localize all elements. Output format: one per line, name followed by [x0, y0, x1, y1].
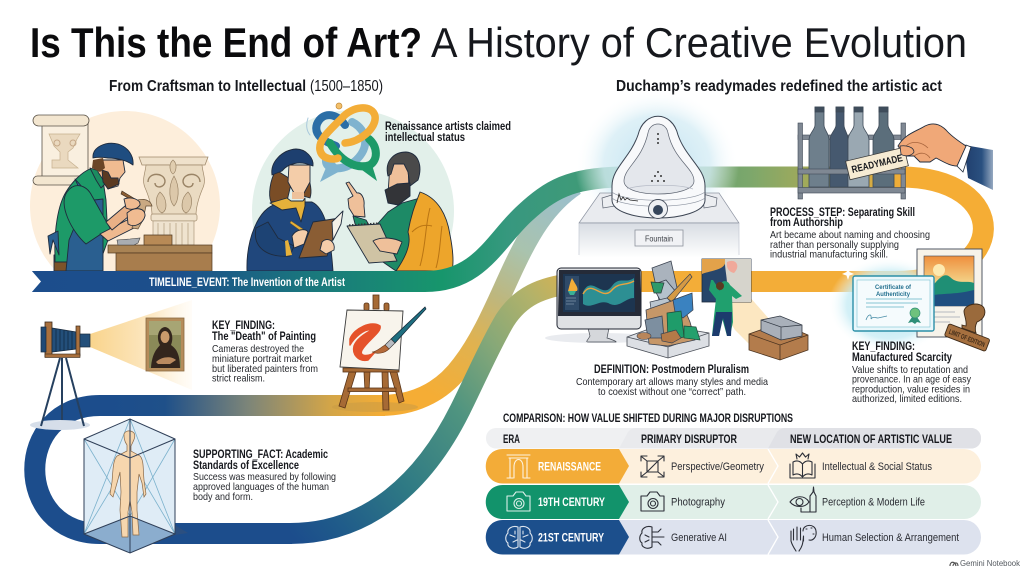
- icon: open book with crown: [790, 453, 815, 478]
- canvas: [340, 310, 403, 370]
- text block: manufactured scarcity: KEY_FINDING:: [852, 341, 915, 353]
- urinal body: [602, 116, 717, 218]
- header row: [486, 428, 981, 448]
- face: [388, 162, 409, 204]
- title: A History of Creative Evolution: [431, 19, 967, 66]
- text block: process step: PROCESS_STEP: Separating Skill: [770, 207, 915, 219]
- green shirt torso: [55, 169, 108, 262]
- row: 21st century: 21ST CENTURY: [538, 532, 604, 544]
- ribbon: timeline band: [31, 177, 905, 282]
- text block: manufactured scarcity: reproduction, value resides in: [852, 384, 970, 396]
- ribbon: upper mid band: [110, 395, 385, 416]
- apron: [66, 179, 103, 271]
- near arm: [64, 186, 110, 244]
- illustration: easel and brush: [332, 295, 426, 412]
- hair: [387, 152, 420, 186]
- column capital: [139, 157, 208, 245]
- trousers: [54, 255, 68, 271]
- framed print: [917, 249, 982, 337]
- ribbon: rising green band: [290, 282, 605, 534]
- row: 19th century: [486, 485, 981, 519]
- face: [288, 165, 310, 193]
- readymade label: READYMADE: [851, 153, 904, 176]
- hand on notepad: [373, 238, 402, 254]
- cube edges: [84, 419, 175, 553]
- row: renaissance: Intellectual & Social Status: [822, 461, 932, 473]
- ribbon: orange lower band returning: [590, 271, 900, 292]
- row: 21st century: Human Selection & Arrangement: [822, 532, 959, 544]
- illustration: human figure in cube: [84, 419, 188, 553]
- title: [30, 19, 967, 66]
- pointing hand: [346, 182, 365, 217]
- illustration: camera and portrait: [30, 300, 192, 430]
- icon: camera white: [507, 492, 530, 511]
- ribbon: orange band rising to timeline: [380, 185, 575, 406]
- notepad: [347, 224, 397, 263]
- illustration: renaissance intellectuals: [246, 102, 454, 271]
- icon: brain white: [506, 526, 532, 548]
- floor shadow: [84, 525, 188, 553]
- craftsman figure: [48, 143, 152, 271]
- workbench: [108, 235, 212, 271]
- bottles: [809, 107, 894, 187]
- hand: [898, 124, 966, 166]
- pencil: [290, 221, 303, 231]
- illustration: postmodern pluralism scene: [545, 259, 808, 360]
- orange robe: [396, 192, 453, 271]
- text block: process step: rather than personally supplying: [770, 239, 899, 251]
- text block: process step: Art became about naming and choosing: [770, 229, 930, 241]
- title: Is This the End of Art?: [30, 19, 422, 66]
- text block: manufactured scarcity: [852, 341, 972, 405]
- sparkles: [842, 267, 854, 280]
- row: renaissance: Perspective/Geometry: [671, 461, 764, 473]
- text block: academic standards: body and form.: [193, 491, 253, 503]
- icon: camera: [641, 492, 664, 511]
- icon: hand with palette: [791, 525, 816, 551]
- projector light beam: [716, 295, 770, 345]
- hands: [292, 230, 308, 248]
- head: [98, 160, 125, 189]
- text block: death of painting: The "Death" of Painting: [212, 331, 316, 343]
- hair: [270, 170, 311, 202]
- heading: duchamp: Duchamp’s readymades redefined the artistic act: [616, 78, 943, 95]
- view camera: [41, 322, 90, 358]
- wooden stamp: [944, 304, 990, 351]
- blue glow: [575, 89, 739, 241]
- text block: definition: DEFINITION: Postmodern Pluralism: [594, 364, 749, 376]
- figure painting: [702, 259, 751, 336]
- caption: renaissance claim: [385, 121, 511, 144]
- pile of objects on plinth: [627, 261, 709, 358]
- text block: process step: from Authorship: [770, 217, 843, 229]
- pedestal: Fountain: [645, 234, 673, 244]
- light cone: [90, 300, 192, 390]
- text block: manufactured scarcity: authorized, limited editions.: [852, 393, 962, 405]
- ribbon: left bend and bottom band: [35, 406, 292, 534]
- heading: craftsman to intellectual: From Craftsman to Intellectual: [109, 78, 306, 95]
- hands: [124, 198, 140, 209]
- caption: renaissance claim: intellectual status: [385, 132, 465, 144]
- row: 19th century: Perception & Modern Life: [822, 496, 925, 508]
- certificate: Authenticity: [876, 291, 910, 298]
- pedestal: [579, 193, 739, 258]
- scholar with book: [247, 149, 343, 271]
- certificate: Certificate of: [875, 284, 912, 291]
- upper rack bar: [798, 135, 905, 140]
- peach backdrop: [30, 111, 220, 271]
- illustration: craftsman carving column: [30, 111, 220, 271]
- ribbon notch: [30, 270, 41, 293]
- book: [299, 218, 340, 258]
- beret: [272, 149, 313, 175]
- certificate glow: [828, 257, 952, 353]
- scroll with column sketch: [33, 115, 89, 185]
- text block: death of painting: strict realism.: [212, 372, 265, 384]
- text block: death of painting: but liberated painters from: [212, 363, 318, 375]
- easel legs: [339, 295, 404, 410]
- neck and collar: [90, 168, 106, 188]
- icon: AI brain: [640, 526, 664, 548]
- mona lisa portrait: [146, 318, 184, 371]
- row: 21st century: [486, 520, 981, 554]
- floor shadows: [545, 333, 655, 343]
- text block: death of painting: [212, 320, 318, 384]
- tripod shadow: [30, 420, 90, 430]
- comparison table: [486, 413, 981, 554]
- beard: [385, 183, 410, 205]
- text block: manufactured scarcity: provenance. In an age of easy: [852, 374, 972, 386]
- text block: manufactured scarcity: Manufactured Scarcity: [852, 352, 952, 364]
- certificate: [853, 276, 934, 331]
- green tunic: [353, 198, 430, 271]
- sleeve and cuff: [964, 145, 993, 190]
- caption: renaissance claim: Renaissance artists claimed: [385, 121, 511, 133]
- text block: academic standards: Standards of Excellence: [193, 460, 299, 472]
- mint backdrop: [252, 110, 454, 271]
- row: renaissance: [486, 449, 981, 484]
- projector on box: [749, 316, 808, 360]
- robe: [247, 202, 333, 271]
- readymade label: [846, 147, 908, 180]
- far arm: [106, 204, 134, 230]
- text block: definition: [576, 364, 768, 398]
- table heading: COMPARISON: HOW VALUE SHIFTED DURING MAJOR DISRUPTIONS: [503, 413, 793, 425]
- timeline event label: TIMELINE_EVENT: The Invention of the Artist: [149, 275, 345, 289]
- flat cap: [93, 143, 133, 165]
- text block: death of painting: Cameras destroyed the: [212, 343, 304, 355]
- header row: ERA: [503, 434, 520, 446]
- illustration: Duchamp fountain: [575, 89, 739, 258]
- rack frame: [798, 123, 906, 199]
- text block: process step: [770, 207, 930, 260]
- text block: academic standards: Success was measured by following: [193, 471, 336, 483]
- text block: manufactured scarcity: Value shifts to reputation and: [852, 364, 968, 376]
- ribbon: right orange bend: [895, 177, 983, 282]
- easel shadow: [332, 402, 418, 412]
- proportion lines: [84, 419, 175, 534]
- header row: NEW LOCATION OF ARTISTIC VALUE: [790, 434, 952, 446]
- tripod: [41, 358, 84, 426]
- intertwined speech bubbles: [307, 103, 377, 182]
- sleeve: [255, 222, 294, 256]
- illustration: readymade bottle rack: [798, 107, 993, 199]
- watermark: Gemini Notebook: Gemini Notebook: [960, 558, 1021, 568]
- translucent cube: [84, 419, 175, 553]
- text block: process step: industrial manufacturing skill.: [770, 248, 888, 260]
- illustration: certificate, print and stamp: [828, 249, 990, 353]
- text block: definition: to coexist without one “correct” path.: [598, 386, 746, 398]
- text block: academic standards: [193, 449, 336, 503]
- text block: death of painting: miniature portrait market: [212, 353, 312, 365]
- text block: definition: Contemporary art allows many styles and media: [576, 376, 768, 388]
- row: 21st century: Generative AI: [671, 532, 727, 544]
- red brush stroke: [350, 324, 380, 360]
- scholar with notepad: [346, 152, 453, 271]
- icon: eye with building: [790, 487, 816, 512]
- thumb over label: [900, 146, 914, 156]
- paintbrush: [372, 307, 426, 353]
- monitor: [557, 268, 641, 342]
- row: renaissance: RENAISSANCE: [538, 462, 601, 474]
- wooden stamp: LIMIT OF EDITION: [948, 329, 986, 349]
- icon: perspective square: [641, 456, 664, 477]
- icon: arch: [507, 455, 530, 478]
- heading: craftsman to intellectual: (1500–1850): [310, 78, 383, 95]
- yellow collar: [270, 198, 305, 222]
- header row: PRIMARY DISRUPTOR: [641, 434, 738, 446]
- carving piece and chisel: [132, 199, 152, 229]
- human figure: [110, 431, 146, 537]
- row: 19th century: 19TH CENTURY: [538, 497, 605, 509]
- text block: academic standards: approved languages of the human: [193, 481, 329, 493]
- text block: death of painting: KEY_FINDING:: [212, 320, 275, 332]
- text block: academic standards: SUPPORTING_FACT: Academic: [193, 449, 328, 461]
- row: 19th century: Photography: [671, 496, 725, 508]
